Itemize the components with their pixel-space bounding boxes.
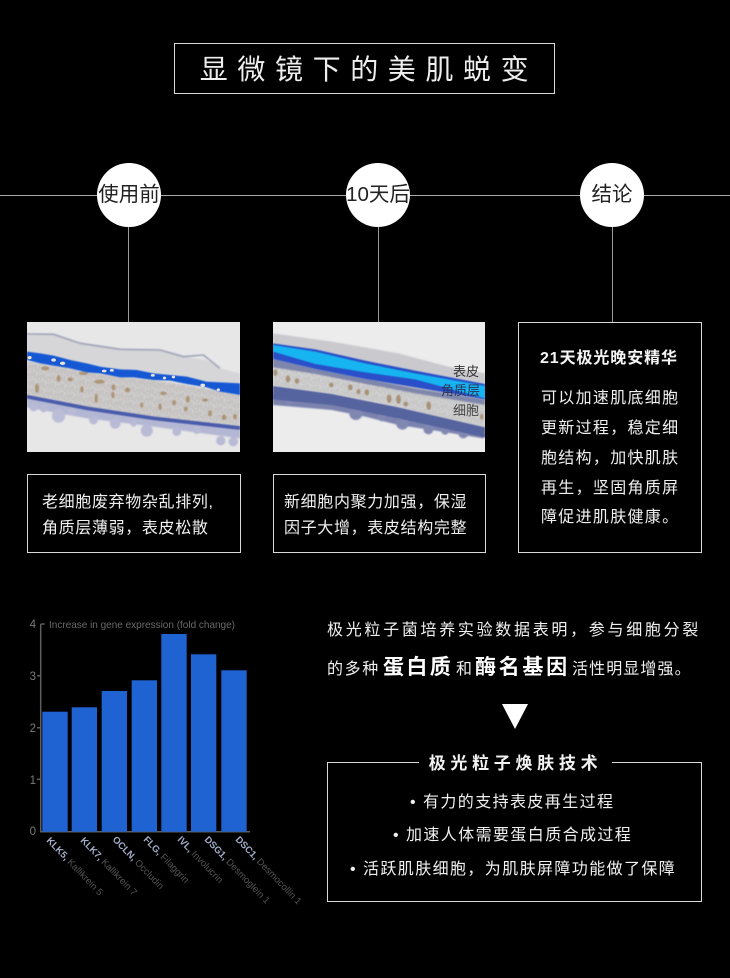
step circle: conclusion <box>580 163 644 227</box>
plain text: 和 <box>456 661 472 678</box>
technology panel <box>327 762 702 902</box>
paragraph line 2 <box>327 656 692 679</box>
connector: before <box>128 226 129 322</box>
chart y tick labels: 4 <box>30 619 37 631</box>
micrograph label: cells: 细胞 <box>453 403 479 418</box>
chart x labels <box>44 834 303 907</box>
conclusion heading: 21天极光晚安精华 <box>540 350 678 367</box>
step circle: conclusion: 结论 <box>592 183 632 206</box>
chart x labels: OCLN, Occludin <box>110 834 166 892</box>
connector: conclusion <box>612 226 613 322</box>
caption line: 新细胞内聚力加强，保湿 <box>284 494 467 511</box>
chart x labels: DSC1, Desmocollin 1 <box>233 834 303 907</box>
technology panel: 加速人体需要蛋白质合成过程 <box>406 827 632 844</box>
bullet 1 <box>410 793 614 811</box>
chart x labels: IVL, Involucrin <box>175 834 225 886</box>
arrow: down triangle <box>502 704 528 729</box>
bullet 3: • <box>350 861 357 878</box>
caption line: 角质层薄弱，表皮松散 <box>42 520 209 537</box>
paragraph line 1: 极光粒子菌培养实验数据表明，参与细胞分裂 <box>327 622 701 639</box>
chart y tick labels: 0 <box>30 826 36 838</box>
chart axes <box>37 624 250 832</box>
technology panel: 有力的支持表皮再生过程 <box>423 794 614 811</box>
bar chart <box>30 619 303 907</box>
step circle: after 10 days: 10天后 <box>346 183 410 206</box>
bullet 1: • <box>410 794 417 811</box>
plain text: 活性明显增强。 <box>572 661 692 678</box>
conclusion line: 可以加速肌底细胞 <box>541 390 679 407</box>
step circle: before <box>97 163 161 227</box>
title box <box>174 43 555 94</box>
chart bars <box>42 634 247 832</box>
caption line: 老细胞废弃物杂乱排列, <box>42 494 214 511</box>
bullet 3 <box>350 860 676 878</box>
caption line: 因子大增，表皮结构完整 <box>284 520 467 537</box>
bullet 2: • <box>393 827 400 844</box>
conclusion line: 更新过程，稳定细 <box>541 420 679 437</box>
timeline line <box>0 195 730 196</box>
conclusion line: 胞结构，加快肌肤 <box>541 450 679 467</box>
bullet 2 <box>393 826 632 844</box>
chart x labels: FLG, Filaggrin <box>141 834 191 886</box>
caption: after <box>273 474 486 553</box>
connector: after <box>378 226 379 322</box>
chart y tick labels: 3 <box>30 671 36 683</box>
micrograph: after 10 days <box>273 322 485 452</box>
step circle: after 10 days <box>346 163 410 227</box>
micrograph label: stratum corneum: 角质层 <box>441 383 480 398</box>
emphasis: enzyme genes: 酶名基因 <box>475 656 570 679</box>
conclusion line: 障促进肌肤健康。 <box>541 509 679 526</box>
chart title: Increase in gene expression (fold change) <box>49 619 235 631</box>
emphasis: protein: 蛋白质 <box>383 656 453 679</box>
chart y tick labels: 2 <box>30 723 36 735</box>
conclusion panel <box>518 322 702 553</box>
chart x labels: DSG1, Desmoglein 1 <box>202 834 272 906</box>
chart x labels: KLK5, Kallikrein 5 <box>44 835 105 898</box>
chart x labels: KLK7, Kallikrein 7 <box>78 835 139 898</box>
micrograph: before <box>27 322 240 452</box>
technology panel: 活跃肌肤细胞，为肌肤屏障功能做了保障 <box>363 861 676 878</box>
chart y tick labels: 1 <box>30 775 36 787</box>
conclusion line: 再生，坚固角质屏 <box>541 480 679 497</box>
chart y tick labels <box>30 619 37 838</box>
title box: 显微镜下的美肌蜕变 <box>200 54 538 85</box>
plain text: 的多种 <box>327 661 380 678</box>
panel heading: 极光粒子焕肤技术 <box>429 754 602 773</box>
micrograph label: epidermis: 表皮 <box>453 364 479 379</box>
step circle: before: 使用前 <box>98 183 160 206</box>
caption: before <box>27 474 241 553</box>
